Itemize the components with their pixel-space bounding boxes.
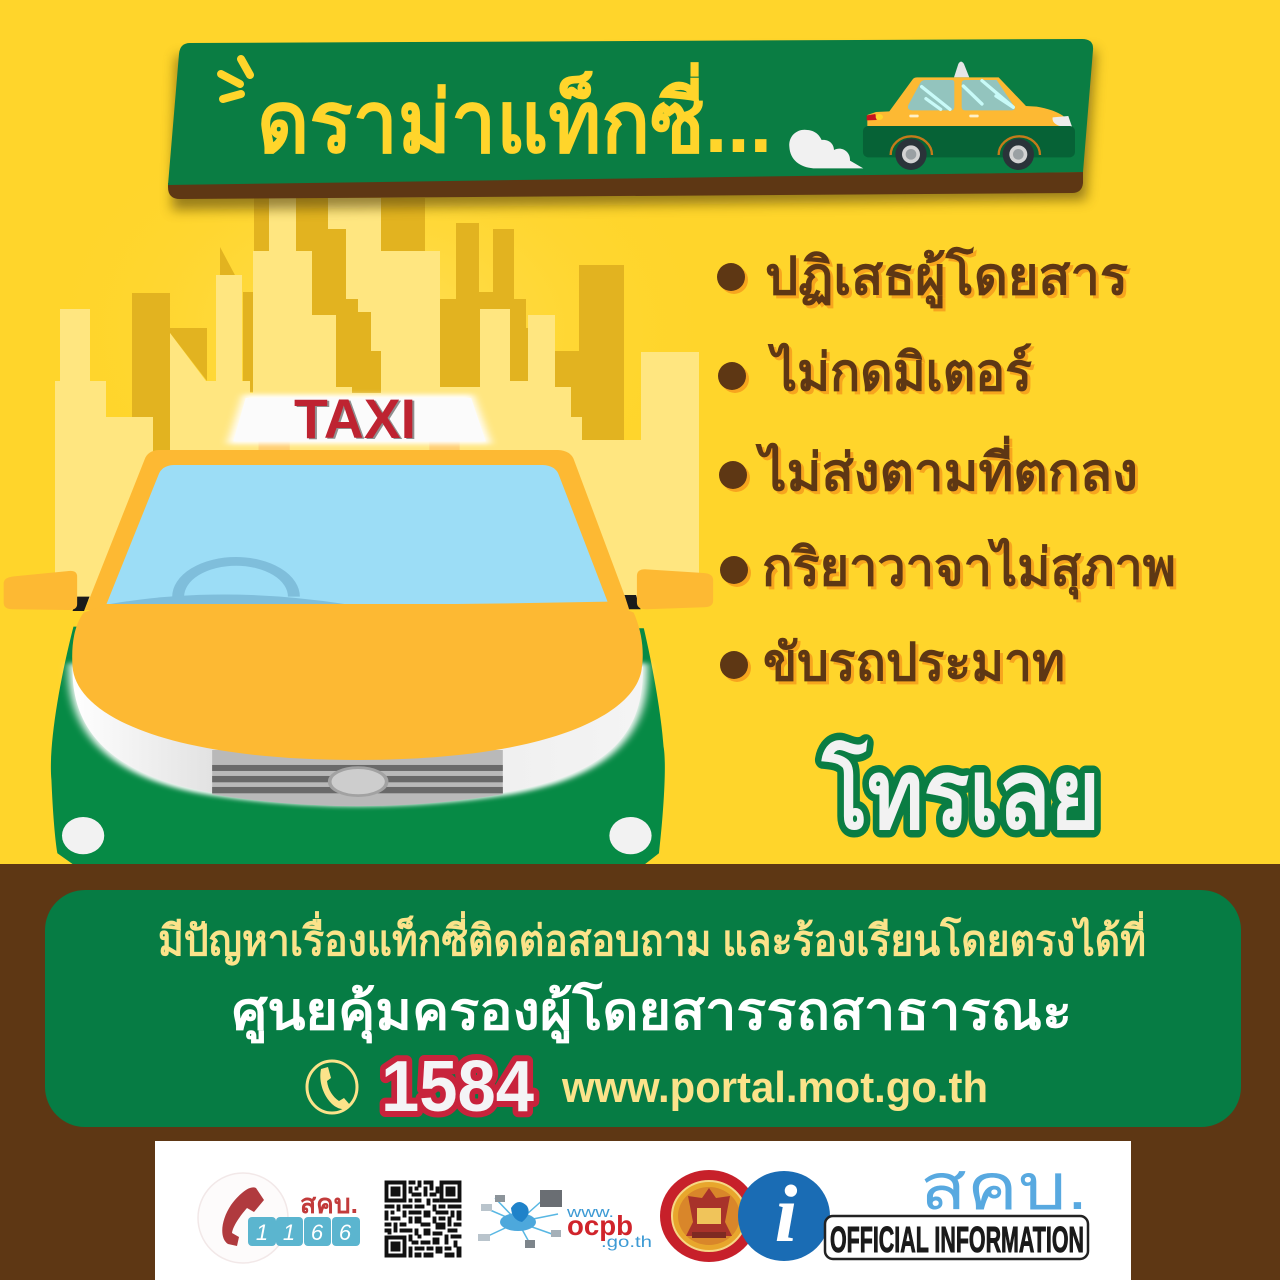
item 4: กริยาวาจาไม่สุภาพ [765, 540, 1179, 603]
item 2: ไม่กดมิเตอร์ [767, 342, 1032, 402]
item 3: ไม่ส่งตามที่ตกลง [758, 439, 1141, 505]
list of taxi complaints [717, 245, 1179, 695]
green body [51, 627, 665, 864]
logo: 1166 hotline: 1 [256, 1220, 268, 1245]
city skyline [55, 198, 699, 600]
icon: phone [307, 1061, 357, 1113]
logo: 1166 hotline: สคบ. [300, 1189, 358, 1219]
logo: 1166 hotline: 1 [283, 1220, 295, 1245]
item 1: ปฏิเสธผู้โดยสาร [765, 245, 1128, 309]
fog lights [62, 817, 652, 854]
logo: 1166 hotline: 6 [311, 1220, 324, 1245]
bottom brown band [0, 864, 1280, 1280]
taxi roof sign [227, 395, 491, 451]
logo: 1166 hotline: 6 [339, 1220, 352, 1245]
contact intro text: มีปัญหาเรื่องแท็กซี่ติดต่อสอบถาม และร้องเรียนโดยตรงได้ที่ [158, 911, 1146, 966]
logo: official information: สคบ. [920, 1151, 1088, 1223]
side mirrors [4, 569, 713, 610]
TAXI sign text: TAXI [294, 387, 416, 450]
item 2: ไม่กดมิเตอร์ [770, 345, 1035, 405]
logo: ocpb network: www. [566, 1204, 614, 1221]
item 4: กริยาวาจาไม่สุภาพ [762, 537, 1176, 600]
QR code [385, 1181, 461, 1257]
steering wheel [110, 561, 344, 604]
panel: logo strip [155, 1141, 1131, 1280]
hotline number: 1584 [381, 1047, 534, 1127]
background glow [40, 90, 720, 570]
logo: info i: i [775, 1168, 798, 1259]
item 3: ไม่ส่งตามที่ตกลง [755, 436, 1138, 502]
logo: ocpb network: .go.th [601, 1234, 652, 1251]
logo: ocpb network: ocpb [567, 1210, 633, 1241]
white bumper [69, 663, 648, 806]
title text: ดราม่าแท็กซี่... [257, 61, 772, 171]
icon: small taxi with exhaust cloud [789, 62, 1075, 170]
contact centre name: ศูนยคุ้มครองผู้โดยสารรถสาธารณะ [232, 980, 1072, 1044]
logo: consumer protection seal [660, 1170, 758, 1262]
logo: official information: OFFICIAL INFORMATION [830, 1219, 1084, 1260]
title sparks [221, 59, 250, 99]
cab roof [85, 450, 630, 610]
logo: info i [738, 1168, 830, 1261]
logo: 1166 hotline [198, 1173, 360, 1263]
item 1: ปฏิเสธผู้โดยสาร [768, 248, 1131, 312]
background [0, 0, 1280, 864]
logo: official information [825, 1151, 1088, 1260]
panel: contact [45, 890, 1241, 1127]
hood [72, 602, 643, 760]
grille [212, 750, 503, 806]
call to action: โทรเลย [821, 740, 1100, 849]
item 5: ขับรถประมาท [766, 637, 1068, 695]
side mirror stems [73, 595, 641, 611]
TAXI sign text: TAXI [296, 388, 418, 451]
logo: ocpb network [478, 1190, 652, 1251]
illustration: front view taxi [4, 387, 713, 864]
windshield [107, 465, 608, 604]
title banner [168, 39, 1096, 210]
website: www.portal.mot.go.th [561, 1063, 988, 1112]
item 5: ขับรถประมาท [763, 634, 1065, 692]
